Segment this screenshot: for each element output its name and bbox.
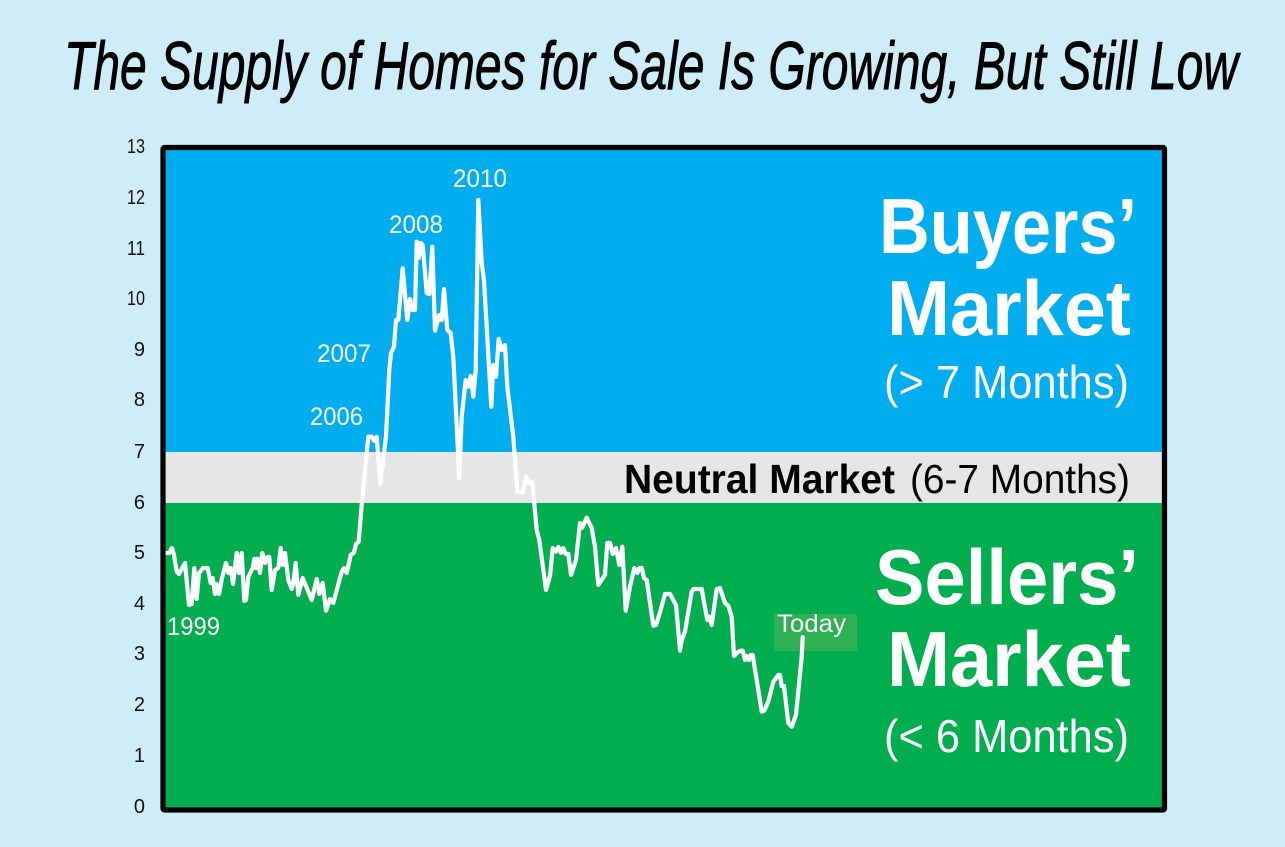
panel: sellers market band xyxy=(163,503,1165,810)
y axis labels: 9 xyxy=(134,339,145,361)
y axis labels: 10 xyxy=(127,288,145,310)
label: buyers market: Market xyxy=(887,264,1131,352)
label: sellers market: Market xyxy=(887,615,1131,703)
y axis labels: 11 xyxy=(127,238,145,260)
label: neutral market xyxy=(624,456,1130,502)
chart frame xyxy=(163,148,1164,810)
label: neutral market: Neutral Market xyxy=(624,456,895,502)
label: sellers market: Sellers’ xyxy=(875,533,1139,621)
y axis labels: 3 xyxy=(134,643,145,665)
label: buyers market xyxy=(879,182,1137,408)
panel: buyers market band xyxy=(163,147,1165,452)
chart xyxy=(163,147,1165,810)
y axis labels: 13 xyxy=(127,136,145,158)
y axis labels: 0 xyxy=(134,796,145,818)
year labels: 2010 xyxy=(453,165,507,193)
y axis labels: 2 xyxy=(134,694,145,716)
y axis labels: 5 xyxy=(134,542,145,564)
today highlight xyxy=(774,614,857,651)
year labels: 1999 xyxy=(167,613,220,641)
label: neutral market: (6-7 Months) xyxy=(910,456,1130,502)
panel: neutral market band xyxy=(163,452,1165,503)
y axis labels: 7 xyxy=(134,441,145,463)
year labels xyxy=(167,165,847,641)
y axis labels: 8 xyxy=(134,389,145,411)
line: months of supply xyxy=(166,200,803,727)
y axis labels: 12 xyxy=(127,187,145,209)
label: buyers market: (> 7 Months) xyxy=(884,356,1129,408)
y axis labels xyxy=(127,136,145,818)
y axis labels: 6 xyxy=(134,492,145,514)
year labels: 2006 xyxy=(310,403,363,431)
year labels: 2007 xyxy=(317,340,371,368)
label: sellers market: (< 6 Months) xyxy=(884,710,1129,762)
year labels: 2008 xyxy=(389,211,443,239)
label: buyers market: Buyers’ xyxy=(879,182,1137,270)
year labels: Today xyxy=(777,610,847,638)
label: sellers market xyxy=(875,533,1139,762)
y axis labels: 4 xyxy=(134,593,145,615)
y axis labels: 1 xyxy=(134,745,145,767)
